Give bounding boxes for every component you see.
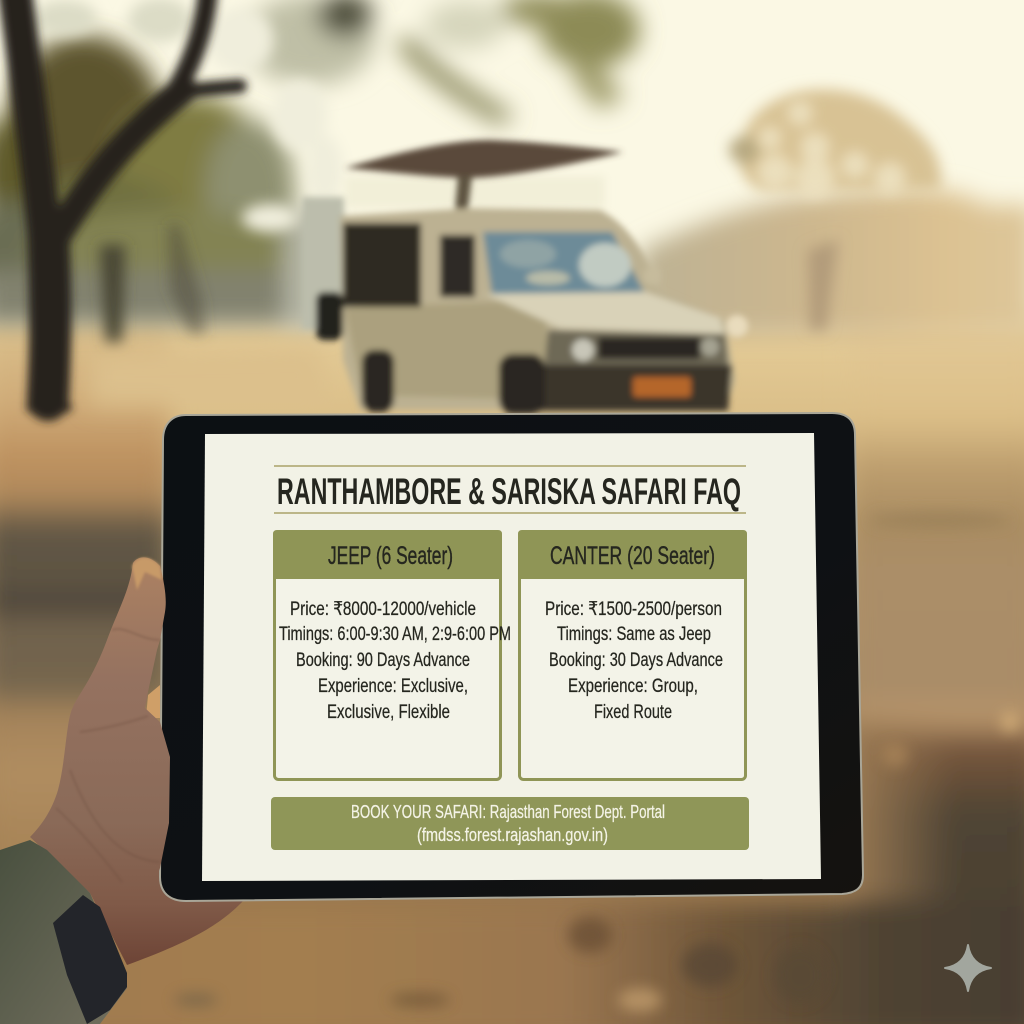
mirror and bokeh: [643, 267, 661, 285]
hand behind tablet, lower palm: [90, 850, 243, 965]
tablet body: [160, 413, 863, 901]
thumb tip: [132, 558, 162, 590]
heading: RANTHAMBORE & SARISKA SAFARI FAQ: [277, 471, 741, 512]
grille: [598, 337, 700, 359]
icon: sparkle watermark: [945, 945, 991, 991]
wheels: [362, 350, 394, 412]
jeep header: [273, 530, 502, 579]
hood: [485, 292, 724, 334]
screen: [202, 433, 821, 881]
booking banner: (fmdss.forest.rajashan.gov.in): [417, 825, 608, 845]
palm creases: [56, 629, 160, 882]
number plate: [633, 377, 691, 397]
canter details: Booking: 30 Days Advance: [549, 650, 723, 671]
soft canopy above jeep: [245, 0, 640, 125]
canter details: [545, 599, 723, 723]
right tree: [729, 89, 941, 330]
canopy: [345, 140, 623, 178]
mottled ground: [174, 512, 1019, 1012]
jeep details: Price: ₹8000-12000/vehicle: [290, 599, 476, 620]
jeep: [302, 140, 748, 414]
canter details: Price: ₹1500-2500/person: [545, 599, 722, 620]
watch strap: [53, 895, 127, 1024]
foliage left: [0, 35, 330, 330]
jeep details: Timings: 6:00-9:30 AM, 2:9-6:00 PM: [279, 624, 511, 645]
fingers behind tablet edge: [146, 685, 160, 718]
canter details: Timings: Same as Jeep: [557, 624, 711, 645]
tablet: [160, 413, 863, 901]
ground light band behind jeep: [90, 345, 330, 405]
panel: canter: [518, 530, 747, 780]
hand holding tablet: [30, 557, 170, 950]
booking banner: [271, 797, 749, 850]
jeep details: [279, 599, 511, 723]
hand and thumb: [30, 557, 170, 950]
rear frame: [302, 197, 344, 329]
canter details: Fixed Route: [594, 702, 672, 723]
distant trunks: [100, 225, 205, 345]
canter heading text: CANTER (20 Seater): [550, 542, 715, 570]
jeep details: Experience: Exclusive,: [318, 676, 468, 697]
rear window: [343, 223, 421, 307]
panel: jeep: [273, 530, 511, 780]
distant haze hills: [640, 189, 1024, 335]
side window: [440, 235, 475, 297]
soft bokeh in right tree: [757, 100, 906, 198]
front fascia: [540, 330, 730, 411]
bright sky behind canopy: [345, 176, 605, 208]
canter header: [518, 530, 747, 579]
jeep details: Exclusive, Flexible: [327, 702, 450, 723]
body: [340, 208, 735, 410]
bright sky gaps in canopy: [33, 0, 343, 232]
left tree trunk and branches: [15, 0, 240, 408]
ground columns and bottom strip: [0, 332, 1024, 1024]
sleeve cuff: [0, 840, 127, 1024]
jeep heading text: JEEP (6 Seater): [328, 542, 453, 570]
windshield: [483, 232, 644, 294]
spare wheel: [316, 292, 343, 340]
booking banner: BOOK YOUR SAFARI: Rajasthan Forest Dept. Portal: [351, 802, 665, 822]
jeep details: Booking: 90 Days Advance: [296, 650, 470, 671]
canter details: Experience: Group,: [568, 676, 698, 697]
